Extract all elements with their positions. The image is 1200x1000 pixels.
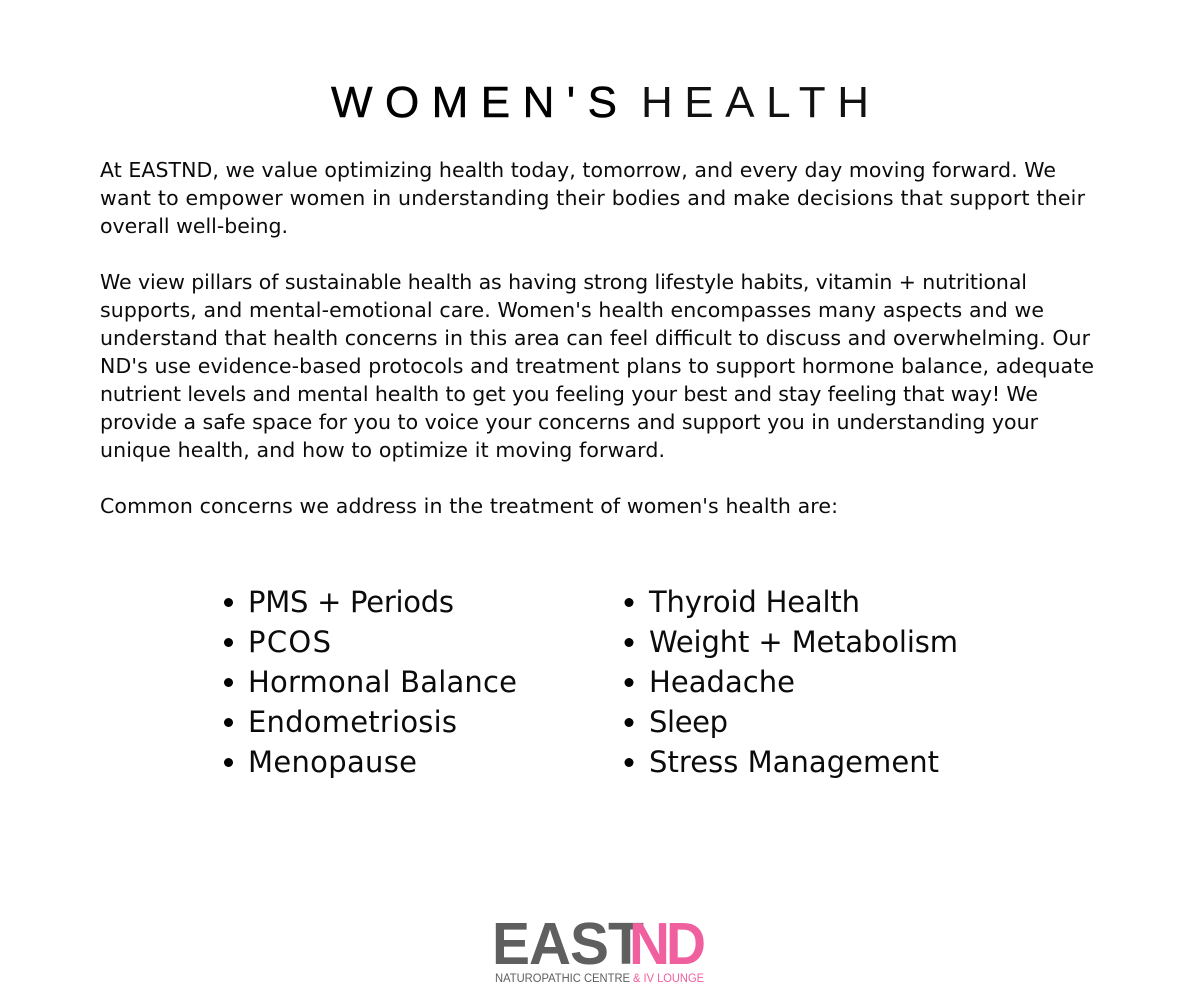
text block: pillars of health: We view pillars of sustainable health as having strong lifestyle habits, vitamin + nutritional [100, 270, 1027, 294]
logo: EASTND: T [608, 911, 644, 977]
logo: EASTND: N [629, 911, 670, 977]
list: concerns column two: Stress Management [649, 745, 939, 779]
text block: introduction: At EASTND, we value optimizing health today, tomorrow, and every day moving forward. We [100, 158, 1056, 182]
list: concerns column one: PMS + Periods [248, 585, 454, 619]
list: concerns column two: Thyroid Health [648, 585, 860, 619]
logo: EASTND: & IV LOUNGE [633, 973, 704, 985]
text block: introduction: overall well-being. [100, 214, 288, 238]
title: HEALTH [641, 78, 869, 127]
text block: introduction [100, 158, 1086, 238]
text block: pillars of health: nutrient levels and mental health to get you feeling your best and stay feeling that way! We [100, 382, 1038, 406]
logo: EASTND [492, 911, 706, 985]
logo: EASTND: D [666, 911, 706, 977]
logo: EASTND: A [529, 911, 571, 977]
text block: introduction: want to empower women in understanding their bodies and make decisions that support their [100, 186, 1086, 210]
list: concerns column one: PCOS [248, 625, 331, 659]
title: WOMEN'S [331, 78, 617, 127]
list: concerns column two [624, 585, 958, 779]
text block: pillars of health: provide a safe space for you to voice your concerns and support you in understanding your [100, 410, 1039, 434]
text block: pillars of health: unique health, and how to optimize it moving forward. [100, 438, 665, 462]
text block: pillars of health: understand that health concerns in this area can feel difficult to discuss and overwhelming. Our [100, 326, 1091, 350]
list: concerns column two: Weight + Metabolism [649, 625, 958, 659]
title [331, 78, 869, 127]
text block: list intro: Common concerns we address in the treatment of women's health are: [100, 494, 838, 518]
text block: pillars of health [100, 270, 1094, 462]
list: concerns column two: Headache [649, 665, 795, 699]
list: concerns column one [224, 585, 517, 779]
logo: EASTND: S [570, 911, 609, 977]
text block: pillars of health: supports, and mental-emotional care. Women's health encompasses many aspects and we [100, 298, 1044, 322]
logo: EASTND: NATUROPATHIC CENTRE [495, 973, 630, 985]
list: concerns column one: Endometriosis [248, 705, 457, 739]
list: concerns column two: Sleep [649, 705, 728, 739]
list: concerns column one: Hormonal Balance [248, 665, 517, 699]
logo: EASTND: E [492, 911, 530, 977]
list: concerns column one: Menopause [248, 745, 417, 779]
text block: pillars of health: ND's use evidence-based protocols and treatment plans to support hormone balance, adequate [100, 354, 1094, 378]
